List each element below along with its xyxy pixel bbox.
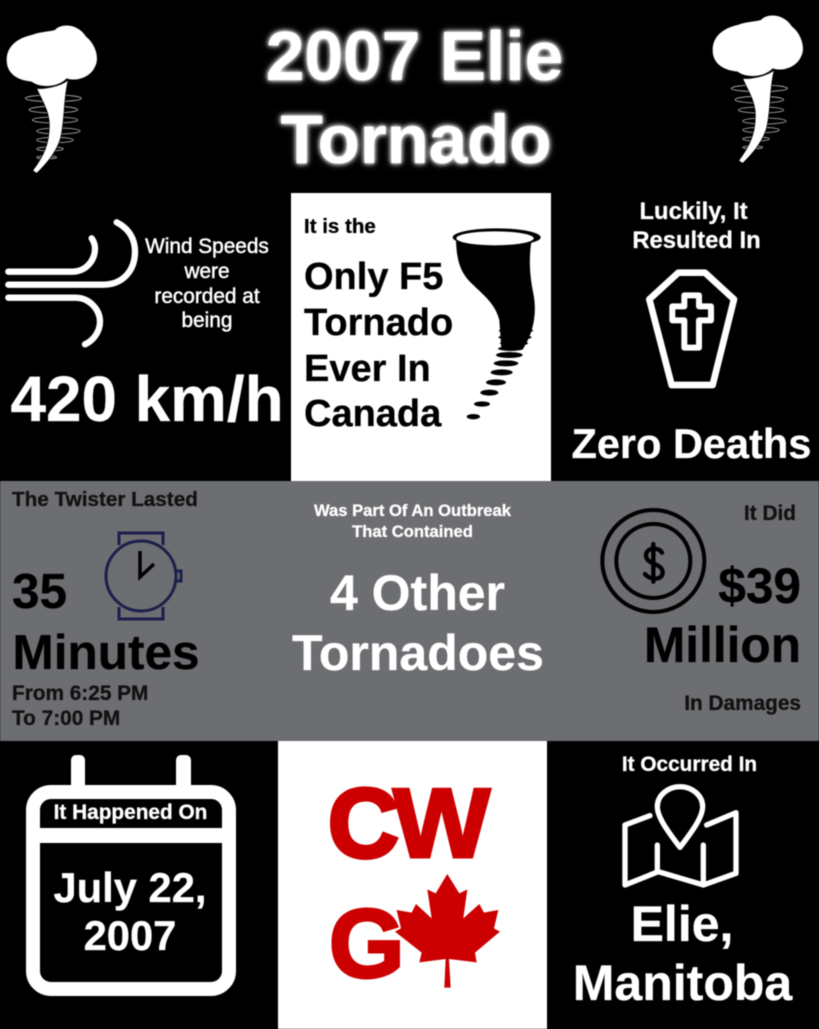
panel: only F5 [291, 193, 551, 481]
text: date value: 2007 [84, 912, 176, 959]
text: time range: To 7:00 PM [12, 707, 120, 730]
icon: dollar coin [602, 510, 704, 612]
text: date value: July 22, [54, 864, 206, 911]
text: outbreak label [314, 501, 512, 541]
text: 4 other tornadoes: 4 Other [330, 565, 505, 621]
panel: logo [278, 741, 547, 1029]
icon: map pin [625, 787, 736, 885]
panel: date [33, 755, 229, 989]
logo text: CW: W [393, 769, 490, 878]
logo text: G: G [329, 889, 404, 998]
text: 39 million: $39 [718, 558, 801, 614]
text: zero deaths: Zero Deaths [572, 420, 811, 467]
icon: watch [106, 533, 181, 619]
title [266, 17, 563, 178]
icon: right tornado [713, 16, 803, 163]
text: it did: It Did [744, 502, 796, 525]
text: 35 minutes [12, 564, 200, 680]
text: place name [573, 896, 793, 1011]
panel: middle band [0, 481, 819, 741]
panel background [291, 193, 551, 481]
icon: coffin [649, 273, 734, 385]
title: Tornado [281, 101, 551, 178]
text: time range [12, 682, 148, 730]
text: it occurred in: It Occurred In [622, 753, 757, 776]
text: luckily [632, 198, 761, 254]
text: time range: From 6:25 PM [12, 682, 148, 705]
text: place name: Manitoba [573, 955, 793, 1011]
text: it is the: It is the [304, 215, 376, 238]
text: 35 minutes: 35 [12, 564, 67, 619]
text: luckily: Luckily, It [640, 198, 748, 225]
text: only F5 tornado: Tornado [304, 302, 453, 344]
text: outbreak label: That Contained [352, 522, 473, 541]
logo background [278, 741, 547, 1029]
panel: zero deaths [572, 198, 811, 467]
text: place name: Elie, [631, 896, 733, 952]
text: wind speeds label: were [183, 260, 230, 283]
text: wind speed value: 420 km/h [10, 363, 284, 435]
icon: left tornado [7, 26, 97, 173]
text: 4 other tornadoes: Tornadoes [292, 625, 544, 681]
icon: maple leaf [395, 874, 500, 988]
text: only F5 tornado [304, 256, 453, 435]
text: twister lasted: The Twister Lasted [12, 488, 198, 511]
text: wind speeds label: being [182, 309, 232, 332]
text: luckily: Resulted In [632, 227, 761, 254]
title: 2007 Elie [266, 17, 563, 95]
text: wind speeds label [145, 235, 269, 332]
text: 35 minutes: Minutes [12, 625, 200, 680]
text: wind speeds label: recorded at [154, 285, 260, 308]
text: outbreak label: Was Part Of An Outbreak [314, 501, 512, 520]
text: date value [54, 864, 206, 959]
icon: calendar [33, 755, 229, 989]
text: only F5 tornado: Canada [304, 393, 442, 435]
panel: location [573, 753, 793, 1011]
band background [0, 481, 819, 741]
text: 39 million: Million [644, 617, 801, 673]
logo text: CW [328, 768, 490, 878]
text: it happened on: It Happened On [54, 801, 207, 824]
logo text: CW: C [328, 768, 399, 878]
panel: wind speed [8, 222, 284, 435]
text: in damages: In Damages [684, 692, 801, 715]
text: 39 million [644, 558, 801, 673]
text: only F5 tornado: Ever In [304, 348, 431, 390]
text: only F5 tornado: Only F5 [304, 256, 443, 298]
text: 4 other tornadoes [292, 565, 544, 681]
panel: header [7, 16, 803, 178]
icon: black tornado [453, 228, 541, 419]
text: wind speeds label: Wind Speeds [145, 235, 269, 258]
icon: wind [8, 222, 135, 344]
